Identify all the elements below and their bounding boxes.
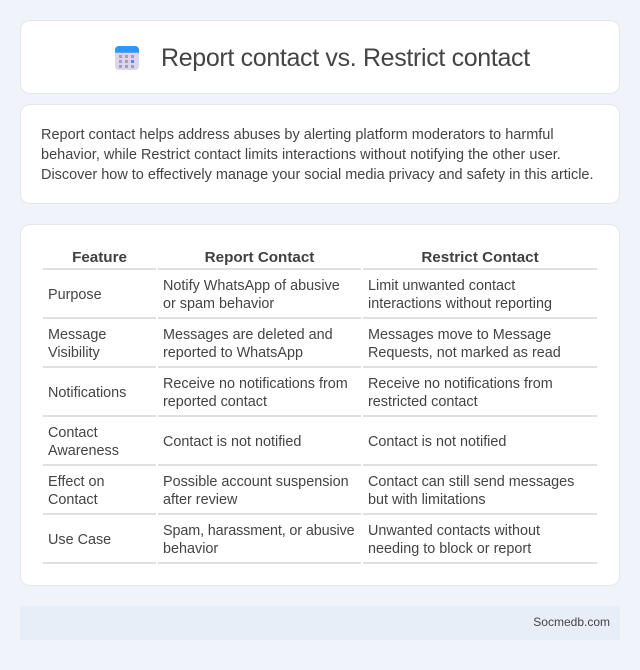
table headers: Restrict Contact: [421, 249, 539, 266]
row: message visibility: Messages are deleted and: [163, 327, 333, 343]
row: notifications: reported contact: [163, 394, 267, 410]
row: use case: needing to block or report: [368, 541, 531, 557]
row: message visibility: Visibility: [48, 345, 100, 361]
row: message visibility: Message: [48, 327, 106, 343]
row: message visibility: reported to WhatsApp: [163, 345, 303, 361]
row: use case: [48, 523, 540, 557]
row: notifications: Receive no notifications from: [368, 376, 553, 392]
row: notifications: Notifications: [48, 385, 126, 401]
row: use case: Unwanted contacts without: [368, 523, 540, 539]
row: notifications: [48, 376, 553, 410]
intro text: [41, 127, 593, 183]
intro panel: [20, 104, 620, 204]
row: effect on contact: but with limitations: [368, 492, 486, 508]
row: use case: Spam, harassment, or abusive: [163, 523, 355, 539]
row: message visibility: Requests, not marked as read: [368, 345, 561, 361]
row: contact awareness: [48, 425, 506, 459]
intro text: Report contact helps address abuses by alerting platform moderators to harmful: [41, 127, 554, 143]
row: effect on contact: Contact can still send messages: [368, 474, 574, 490]
title: Report contact vs. Restrict contact: [161, 44, 530, 72]
row: message visibility: [48, 327, 561, 361]
table headers: Report Contact: [205, 249, 314, 266]
row: purpose: Purpose: [48, 287, 102, 303]
row: effect on contact: Possible account suspension: [163, 474, 349, 490]
intro text: Discover how to effectively manage your social media privacy and safety in this article.: [41, 167, 593, 183]
row: purpose: interactions without reporting: [368, 296, 552, 312]
row: notifications: Receive no notifications from: [163, 376, 348, 392]
row: message visibility: Messages move to Message: [368, 327, 551, 343]
row: contact awareness: Contact is not notified: [368, 434, 506, 450]
table headers: [72, 249, 539, 266]
title panel: [20, 20, 620, 94]
row: use case: behavior: [163, 541, 218, 557]
footer bar: [20, 606, 620, 640]
table panel: [20, 224, 620, 586]
row: effect on contact: after review: [163, 492, 237, 508]
row: purpose: [48, 278, 552, 312]
intro text: behavior, while Restrict contact limits interactions without notifying the other user.: [41, 147, 561, 163]
row: purpose: Limit unwanted contact: [368, 278, 515, 294]
row: effect on contact: Effect on: [48, 474, 105, 490]
row: purpose: or spam behavior: [163, 296, 274, 312]
row: purpose: Notify WhatsApp of abusive: [163, 278, 340, 294]
row: contact awareness: Contact is not notified: [163, 434, 301, 450]
row: contact awareness: Awareness: [48, 443, 119, 459]
icon: calendar: [115, 46, 139, 70]
table headers: Feature: [72, 249, 127, 266]
row: contact awareness: Contact: [48, 425, 98, 441]
row: notifications: restricted contact: [368, 394, 478, 410]
row: effect on contact: [48, 474, 574, 508]
row: effect on contact: Contact: [48, 492, 98, 508]
row: use case: Use Case: [48, 532, 111, 548]
footer text: Socmedb.com: [533, 615, 610, 629]
